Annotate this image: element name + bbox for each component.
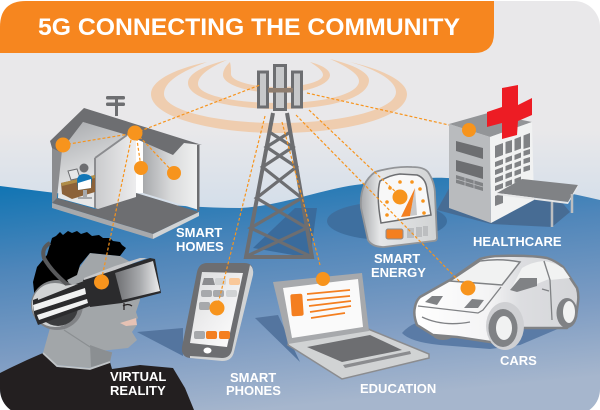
antenna panels [258,66,302,110]
head strap [41,241,70,286]
title banner [0,1,494,53]
laptop [255,273,429,379]
meter body [361,167,437,247]
right windows [495,133,530,206]
hair [33,231,126,300]
body lines [418,261,552,324]
label: smart energy: SMART [374,251,420,266]
label: smart phones: SMART [230,370,276,385]
car [402,256,578,350]
meter dial [378,174,431,223]
roof [449,113,532,137]
mouth and eye [120,318,137,326]
side windows [511,261,549,292]
tower [245,66,317,258]
laptop base [288,329,429,379]
app icons [194,278,240,339]
right face [490,122,534,223]
phone floor shadow [137,328,183,356]
shirt [0,353,194,410]
label: smart energy: ENERGY [371,265,426,280]
phone screen [190,272,243,347]
red cross [487,85,532,139]
label: healthcare: HEALTHCARE [473,234,562,249]
needle [410,188,417,216]
label: smart phones: PHONES [226,383,281,398]
smart phone [182,263,253,361]
left face [449,124,491,223]
label: cars: CARS [500,353,537,368]
left wall edge [52,142,62,203]
car body [414,256,578,345]
wheels [486,302,524,350]
roof [50,108,202,155]
canopy [497,179,578,202]
laptop screen [273,273,369,344]
label: smart homes: SMART [176,225,222,240]
divider wall [95,133,136,209]
left room back wall [58,122,127,208]
label: virtual reality: VIRTUAL [110,369,166,384]
connection dots [56,123,476,316]
neck shading [90,345,112,367]
neck and head [43,253,140,368]
house floor [52,193,199,234]
label: education: EDUCATION [360,381,436,396]
screen content [290,290,351,318]
laptop shadow [255,315,300,362]
car shadow [402,320,560,349]
visor [83,258,161,307]
wing mirror [510,278,537,292]
right room back wall [143,138,199,210]
person at desk [61,164,95,199]
label: virtual reality: REALITY [110,383,166,398]
connection lines [63,85,460,308]
headlights [425,296,484,308]
building shadow [437,183,570,227]
phone body [182,263,253,360]
windscreen [450,260,520,285]
strap stripes [33,281,90,325]
front far wheel [433,330,453,340]
signal rings [151,59,407,133]
meter shadow [327,202,447,240]
label: smart homes: HOMES [176,239,224,254]
smart homes house [50,96,202,239]
antenna [106,96,125,116]
ear cup [31,280,83,330]
smart energy meter [327,167,447,247]
title: 5G CONNECTING THE COMMUNITY [38,14,460,41]
hospital [437,85,578,227]
tower lattice [245,113,312,257]
virtual reality person [0,231,194,410]
tower shadow [253,208,317,258]
left windows [456,141,483,179]
